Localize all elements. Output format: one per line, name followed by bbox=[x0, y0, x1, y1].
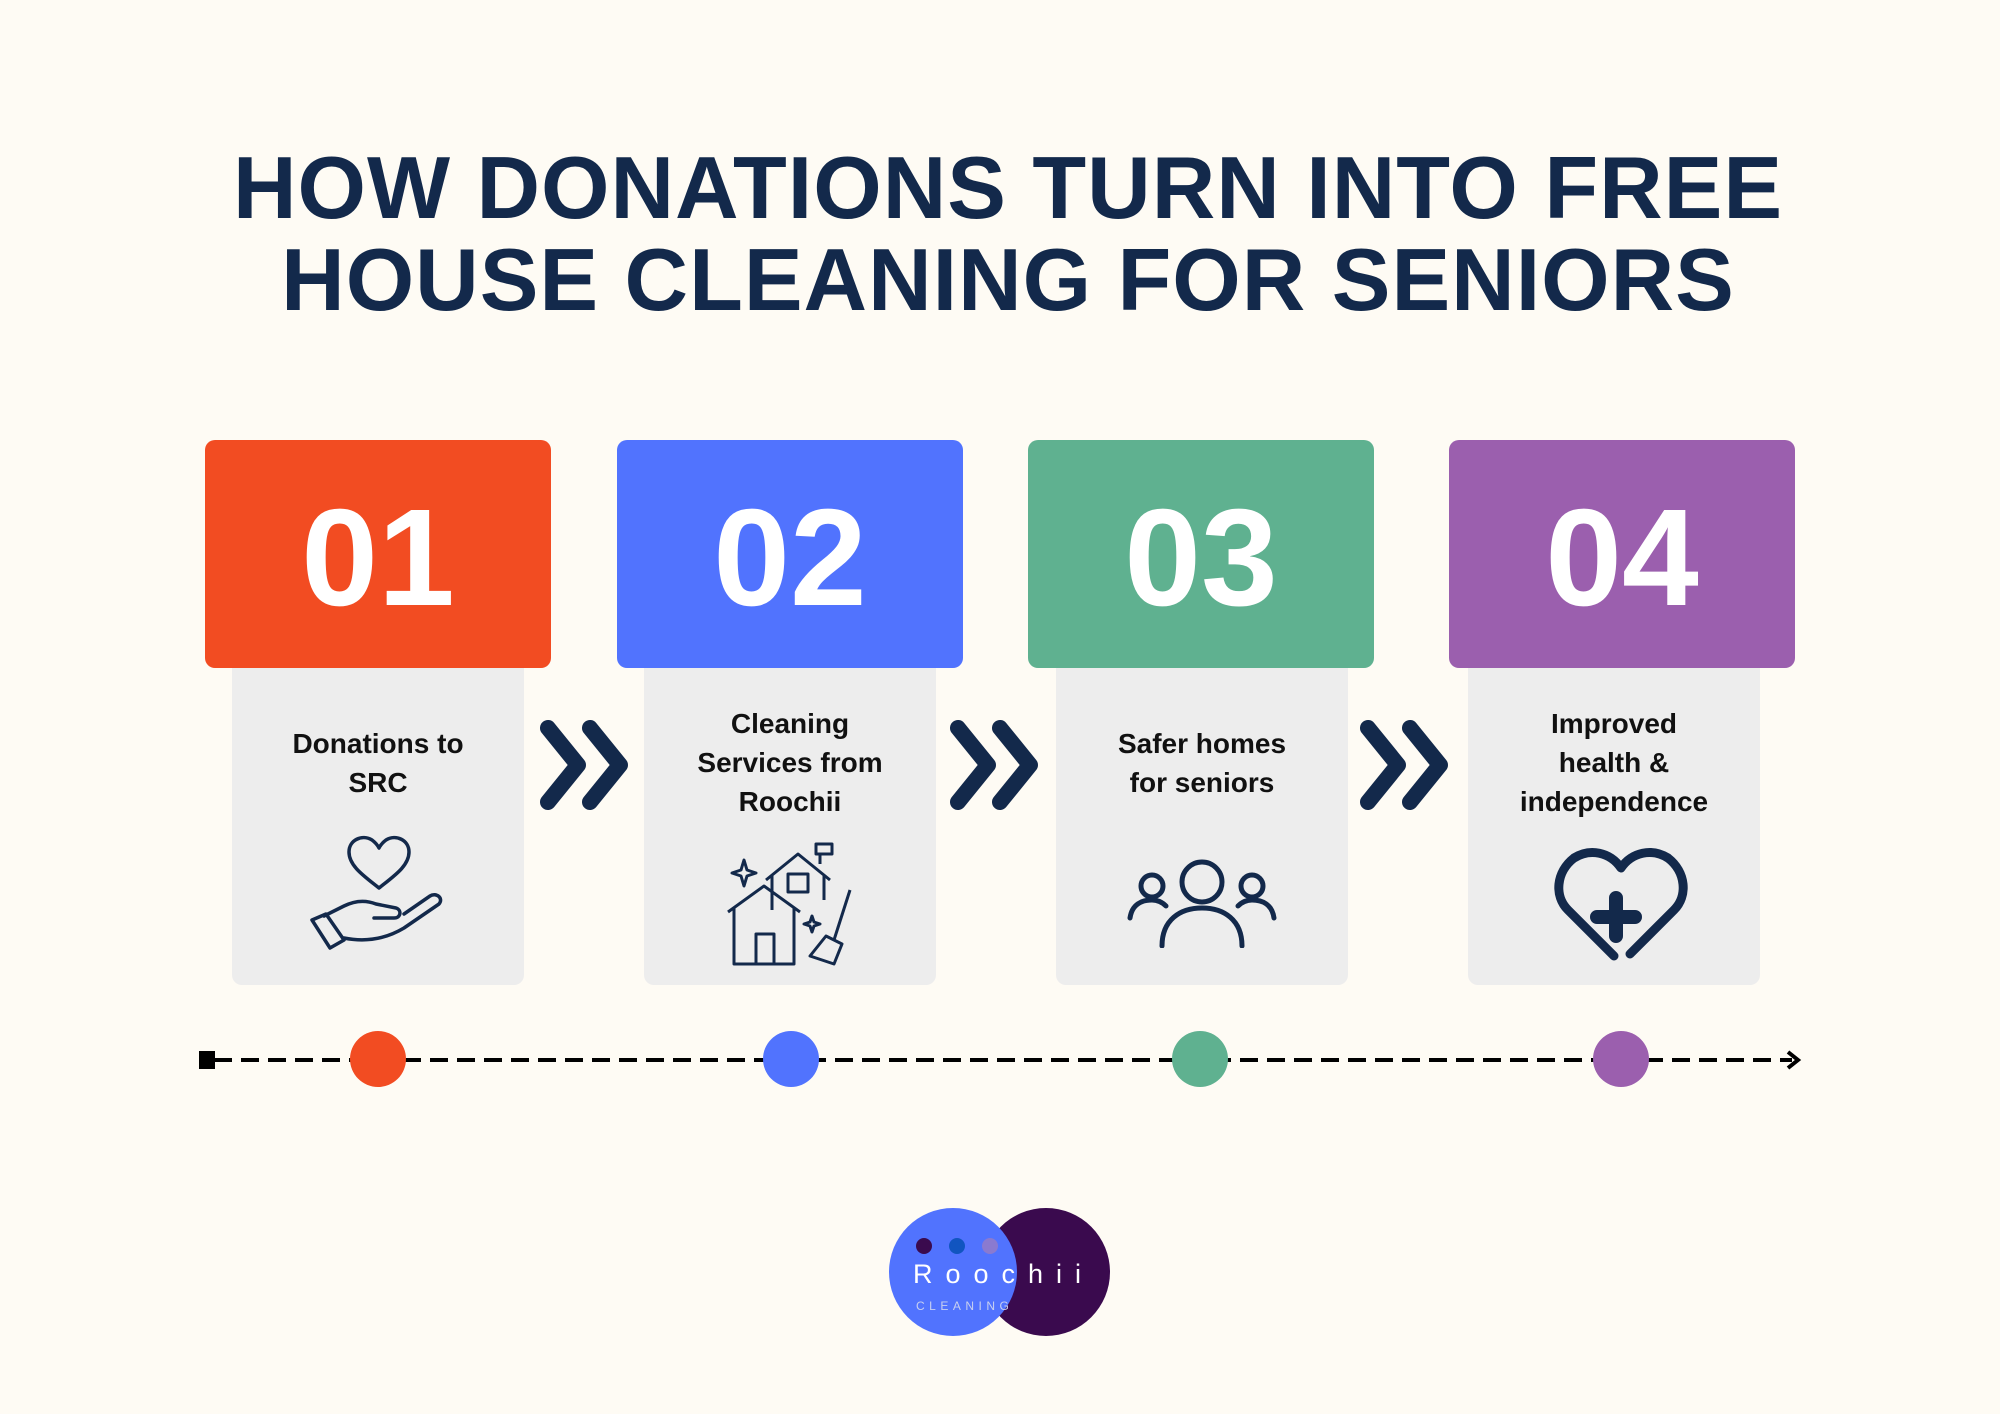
text: donations: Donations to bbox=[292, 728, 464, 759]
text: improved health bbox=[1520, 708, 1708, 817]
logo bbox=[889, 1208, 1110, 1336]
icon: people group bbox=[1128, 860, 1276, 948]
panel: step 3 bbox=[1056, 668, 1348, 985]
text: improved health: independence bbox=[1520, 786, 1708, 817]
text: cleaning services: Cleaning bbox=[731, 708, 849, 739]
logo: Roochii bbox=[913, 1259, 1094, 1289]
chevron 2 bbox=[950, 720, 1038, 810]
title bbox=[233, 138, 1783, 329]
panel: step 2 bbox=[644, 668, 936, 985]
step 3 number box: 03 bbox=[1124, 481, 1278, 635]
timeline dot 2 bbox=[763, 1031, 819, 1087]
logo: CLEANING bbox=[916, 1299, 1013, 1313]
icon: houses and broom bbox=[727, 842, 852, 966]
chevron 1 bbox=[540, 720, 628, 810]
timeline bbox=[199, 1050, 1802, 1070]
text: cleaning services: Services from bbox=[697, 747, 883, 778]
text: cleaning services bbox=[697, 708, 883, 817]
step 2 number box: 02 bbox=[713, 481, 867, 635]
text: donations bbox=[292, 728, 464, 798]
step 1 number box bbox=[205, 440, 551, 668]
panel: step 4 bbox=[1468, 668, 1760, 985]
step 3 number box bbox=[1028, 440, 1374, 668]
step 2 number box bbox=[617, 440, 963, 668]
text: donations: SRC bbox=[348, 767, 408, 798]
title: HOUSE CLEANING FOR SENIORS bbox=[281, 230, 1735, 329]
text: safer homes bbox=[1118, 728, 1286, 798]
timeline dot 1 bbox=[350, 1031, 406, 1087]
text: improved health: health & bbox=[1559, 747, 1669, 778]
text: safer homes: for seniors bbox=[1130, 767, 1274, 798]
icon: hand heart bbox=[310, 836, 442, 950]
text: safer homes: Safer homes bbox=[1118, 728, 1286, 759]
panel: step 1 bbox=[232, 668, 524, 985]
step 1 number box: 01 bbox=[301, 481, 455, 635]
step 4 number box bbox=[1449, 440, 1795, 668]
step 4 number box: 04 bbox=[1545, 481, 1699, 635]
timeline dot 4 bbox=[1593, 1031, 1649, 1087]
title: HOW DONATIONS TURN INTO FREE bbox=[233, 138, 1783, 237]
text: improved health: Improved bbox=[1551, 708, 1677, 739]
timeline dot 3 bbox=[1172, 1031, 1228, 1087]
chevron 3 bbox=[1360, 720, 1448, 810]
icon: heart with cross bbox=[1554, 848, 1688, 960]
text: cleaning services: Roochii bbox=[739, 786, 841, 817]
